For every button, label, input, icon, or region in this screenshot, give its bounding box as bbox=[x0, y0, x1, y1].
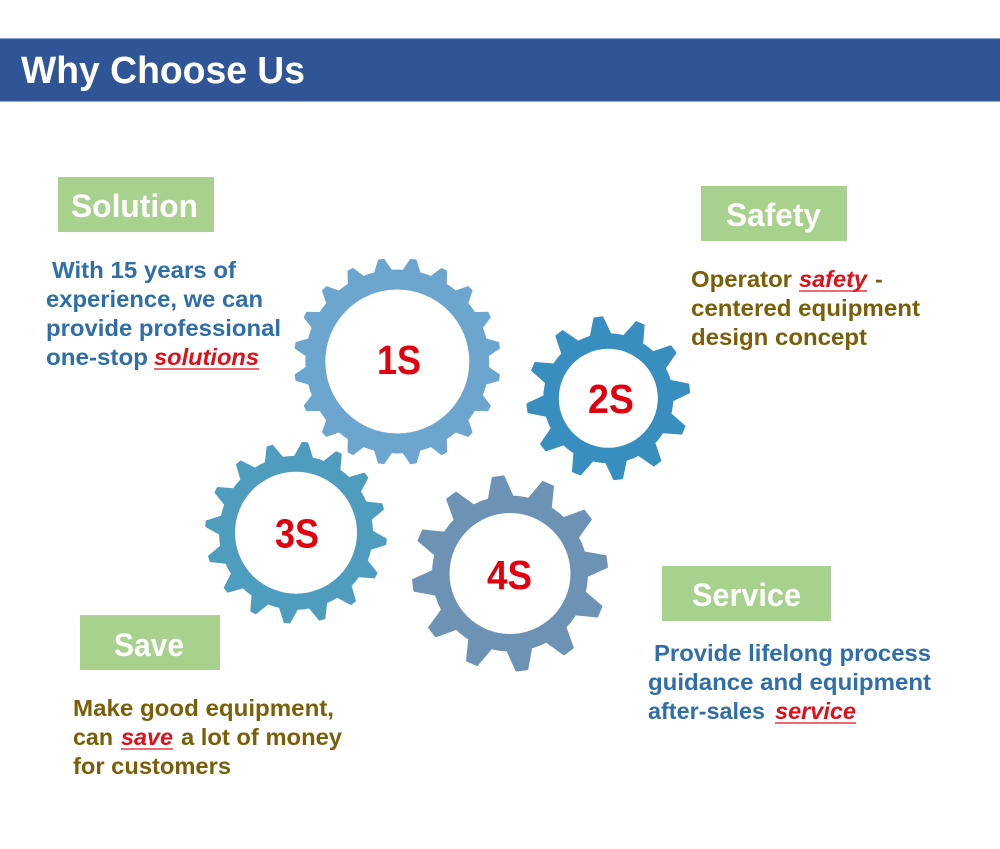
text block: Safety description: design concept bbox=[691, 324, 867, 350]
text block: Safety description: Operator bbox=[691, 266, 792, 292]
gear 1S bbox=[295, 259, 500, 464]
label: Solution: Solution bbox=[71, 188, 198, 224]
text block: Save description: a lot of money bbox=[181, 724, 342, 750]
text block: Solution description: solutions bbox=[154, 344, 259, 370]
label: Safety: Safety bbox=[726, 197, 821, 233]
label: Solution bbox=[58, 177, 214, 232]
text block: Save description: Make good equipment, bbox=[73, 695, 334, 721]
text block: Save description: can bbox=[73, 724, 113, 750]
label: Service bbox=[662, 566, 831, 621]
text block: Safety description bbox=[691, 266, 920, 350]
title: Why Choose Us bbox=[21, 50, 305, 92]
text block: Service description: after-sales bbox=[648, 698, 765, 724]
label: Save: Save bbox=[114, 627, 184, 663]
text block: Solution description: one-stop bbox=[46, 344, 148, 370]
text block: Safety description: safety bbox=[799, 266, 868, 292]
text block: Solution description bbox=[46, 257, 281, 370]
text block: Solution description: With 15 years of bbox=[52, 257, 236, 283]
gear number 4S: 4S bbox=[487, 552, 532, 598]
text block: Service description bbox=[648, 640, 931, 724]
label: Save bbox=[80, 615, 220, 670]
text block: Service description: Provide lifelong process bbox=[654, 640, 931, 666]
gear 2S bbox=[527, 317, 690, 480]
gear number 1S: 1S bbox=[377, 337, 421, 383]
text block: Safety description: - bbox=[875, 266, 883, 292]
text block: Save description bbox=[73, 695, 342, 779]
text block: Save description: save bbox=[121, 724, 173, 750]
gear number 2S: 2S bbox=[588, 376, 634, 422]
label: Service: Service bbox=[692, 577, 801, 613]
text block: Service description: guidance and equipment bbox=[648, 669, 931, 695]
text block: Save description: for customers bbox=[73, 753, 231, 779]
text block: Service description: service bbox=[775, 698, 856, 724]
label: Safety bbox=[701, 186, 847, 241]
header banner bbox=[0, 38, 1000, 102]
gear 3S bbox=[206, 442, 386, 623]
gear number 3S: 3S bbox=[275, 511, 319, 557]
text block: Solution description: provide professional bbox=[46, 315, 281, 341]
gear 4S bbox=[412, 476, 608, 671]
text block: Safety description: centered equipment bbox=[691, 295, 920, 321]
text block: Solution description: experience, we can bbox=[46, 286, 263, 312]
